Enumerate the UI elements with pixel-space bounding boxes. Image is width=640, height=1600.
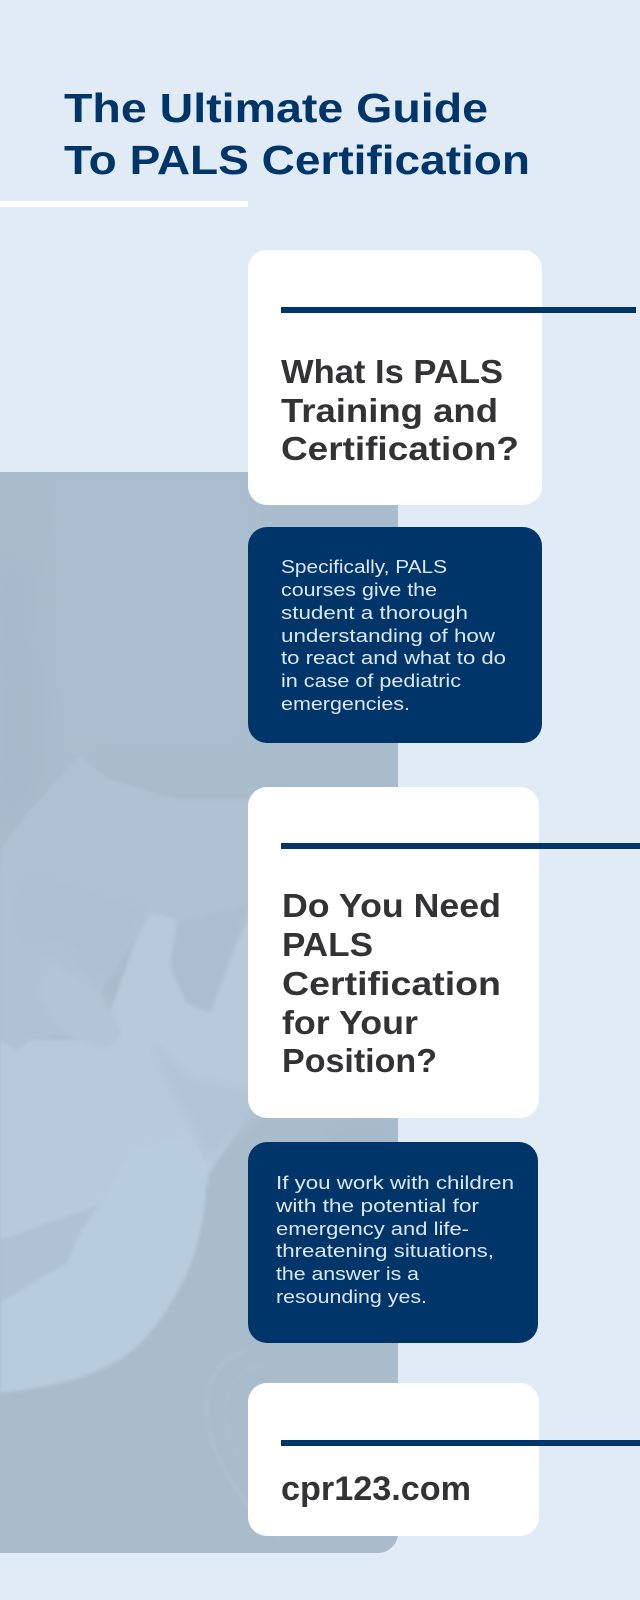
panel: what is PALS description (248, 527, 542, 743)
heading: Do You Need (282, 887, 501, 924)
rolled towel outline (206, 1352, 280, 1540)
heading: Certification? (281, 430, 519, 467)
lower diagonal shade (150, 1040, 260, 1160)
divider line (281, 843, 640, 849)
panel: do you need PALS description: resounding yes. (276, 1286, 427, 1307)
panel: what is PALS description: understanding of how (281, 625, 496, 646)
panel: do you need PALS description: threatening situations, (276, 1240, 494, 1261)
heading (281, 353, 519, 467)
panel: do you need PALS heading card (248, 787, 640, 1118)
panel: do you need PALS description (248, 1142, 538, 1343)
heading: What Is PALS (281, 353, 503, 390)
panel: website card (248, 1383, 640, 1536)
heading: for Your (282, 1004, 418, 1041)
glove pale fingertip (40, 960, 120, 1047)
manikin arm (0, 1195, 205, 1392)
title: To PALS Certification (64, 137, 530, 183)
panel: what is PALS description: emergencies. (281, 693, 410, 714)
panel: what is PALS description: in case of pediatric (281, 670, 461, 691)
heading: Position? (282, 1042, 437, 1079)
heading: Certification (282, 965, 501, 1002)
heading: PALS (282, 926, 373, 963)
panel: do you need PALS description: the answer is a (276, 1263, 420, 1284)
divider line (281, 307, 636, 313)
manikin sleeve edge (178, 1130, 208, 1185)
panel: what is PALS heading card (248, 250, 636, 505)
panel: what is PALS description: student a thorough (281, 602, 468, 623)
shade between torso and arm (0, 1205, 100, 1303)
glove (184, 905, 233, 917)
background photo: gloved hand on infant manikin (0, 472, 398, 1553)
heading: Training and (281, 392, 498, 429)
white rule under title (0, 201, 248, 207)
light area behind hand and manikin torso (0, 900, 260, 1240)
title: The Ultimate Guide (64, 85, 488, 131)
glove shaded finger (171, 905, 248, 1012)
heading (282, 887, 501, 1079)
panel: what is PALS description: Specifically, PALS (281, 556, 447, 577)
panel: do you need PALS description: If you work with children (276, 1172, 514, 1193)
website address: cpr123.com (281, 1470, 471, 1508)
panel: what is PALS description: to react and what to do (281, 647, 506, 668)
panel: what is PALS description: courses give the (281, 579, 437, 600)
glove palm shade (10, 870, 150, 985)
divider line (281, 1440, 640, 1446)
panel: do you need PALS description: with the potential for (275, 1195, 479, 1216)
title (64, 85, 530, 183)
panel: do you need PALS description: emergency and life- (276, 1218, 469, 1239)
